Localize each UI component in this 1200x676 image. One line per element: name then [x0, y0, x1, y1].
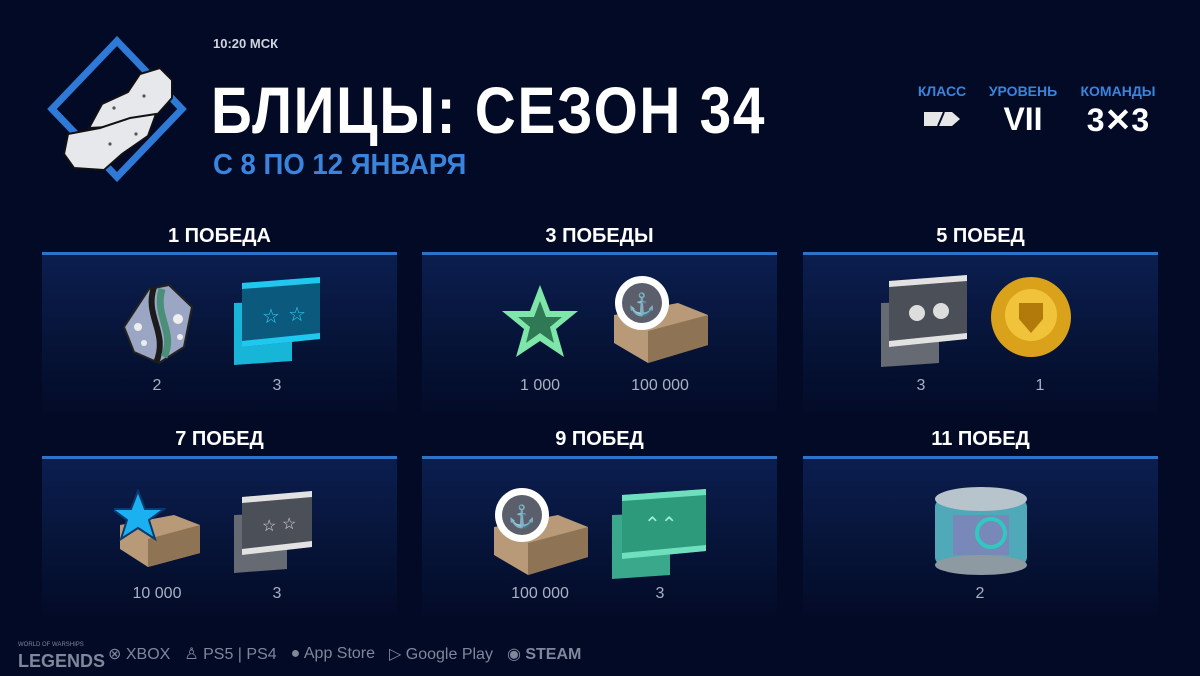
icon: green star — [502, 285, 578, 357]
icon: grey flag small: ☆ — [282, 516, 296, 533]
footer: platform logos — [18, 642, 581, 670]
info: class — [918, 83, 966, 126]
footer: platform logos: ▷ Google Play — [389, 646, 493, 663]
footer: platform logos: ● App Store — [291, 645, 375, 662]
time: 10:20 МСК — [213, 36, 278, 51]
icon: gold laurel emblem — [991, 277, 1071, 357]
panel: 11 побед: 2 — [976, 585, 984, 602]
heading: 7 побед: 7 ПОБЕД — [175, 428, 264, 450]
logo: gauntlets in diamond — [47, 36, 187, 182]
heading: 5 побед: 5 ПОБЕД — [936, 225, 1025, 247]
info: class: КЛАСС — [918, 83, 966, 99]
icon: grey flag small — [234, 491, 312, 573]
info: teams — [1080, 83, 1156, 138]
panel: 7 побед — [42, 456, 397, 616]
footer: platform logos: ♙ PS5 | PS4 — [184, 646, 277, 663]
icon: crate with coin — [614, 276, 708, 363]
panel: 1 победа — [42, 252, 397, 412]
heading: 11 побед: 11 ПОБЕД — [931, 428, 1030, 450]
panel: 9 побед: 100 000 — [511, 585, 569, 602]
icon: crate with blue star — [114, 489, 200, 567]
icon: green flag — [612, 489, 706, 579]
info: level: VII — [1003, 101, 1043, 137]
footer: platform logos: ⊗ XBOX — [108, 646, 170, 663]
panel: 1 победа: 3 — [273, 377, 281, 394]
icon: blue flag: ☆ — [288, 304, 306, 326]
panel: 3 победы: 1 000 — [520, 377, 560, 394]
icon: container drum — [935, 487, 1027, 575]
panel: 5 побед: 3 — [917, 377, 925, 394]
heading: 1 победа: 1 ПОБЕДА — [168, 225, 271, 247]
icon: blue flag — [234, 277, 320, 365]
icon: crate with coin: ⚓ — [508, 504, 536, 529]
heading: 9 побед: 9 ПОБЕД — [555, 428, 644, 450]
icon: grey flag small: ☆ — [262, 518, 276, 535]
icon: green flag: ⌃⌃ — [644, 514, 678, 536]
panel: 7 побед: 3 — [273, 585, 281, 602]
footer: platform logos: LEGENDS — [18, 650, 105, 670]
info: level: УРОВЕНЬ — [989, 83, 1057, 99]
title: БЛИЦЫ: СЕЗОН 34 — [211, 73, 766, 147]
info: teams: 3✕3 — [1087, 102, 1149, 138]
panel: 9 побед — [422, 456, 777, 616]
subtitle dates: С 8 ПО 12 ЯНВАРЯ — [213, 149, 466, 181]
panel: 5 побед — [803, 252, 1158, 412]
icon: grey flag — [881, 275, 967, 367]
panel: 3 победы — [422, 252, 777, 412]
icon: blue flag: ☆ — [262, 306, 280, 328]
icon: camouflage — [123, 284, 193, 364]
icon: crate with coin — [494, 488, 588, 575]
info: teams: КОМАНДЫ — [1080, 83, 1156, 99]
panel: 1 победа: 2 — [153, 377, 161, 394]
panel: 11 побед — [803, 456, 1158, 616]
panel: 9 побед: 3 — [656, 585, 664, 602]
panel: 5 побед: 1 — [1036, 377, 1044, 394]
icon: crate with coin: ⚓ — [628, 292, 656, 317]
footer: platform logos: WORLD OF WARSHIPS — [18, 642, 84, 648]
heading: 3 победы: 3 ПОБЕДЫ — [545, 225, 654, 247]
panel: 3 победы: 100 000 — [631, 377, 689, 394]
panel: 7 побед: 10 000 — [133, 585, 181, 602]
footer: platform logos: ◉ STEAM — [507, 646, 581, 663]
info: level — [989, 83, 1057, 137]
